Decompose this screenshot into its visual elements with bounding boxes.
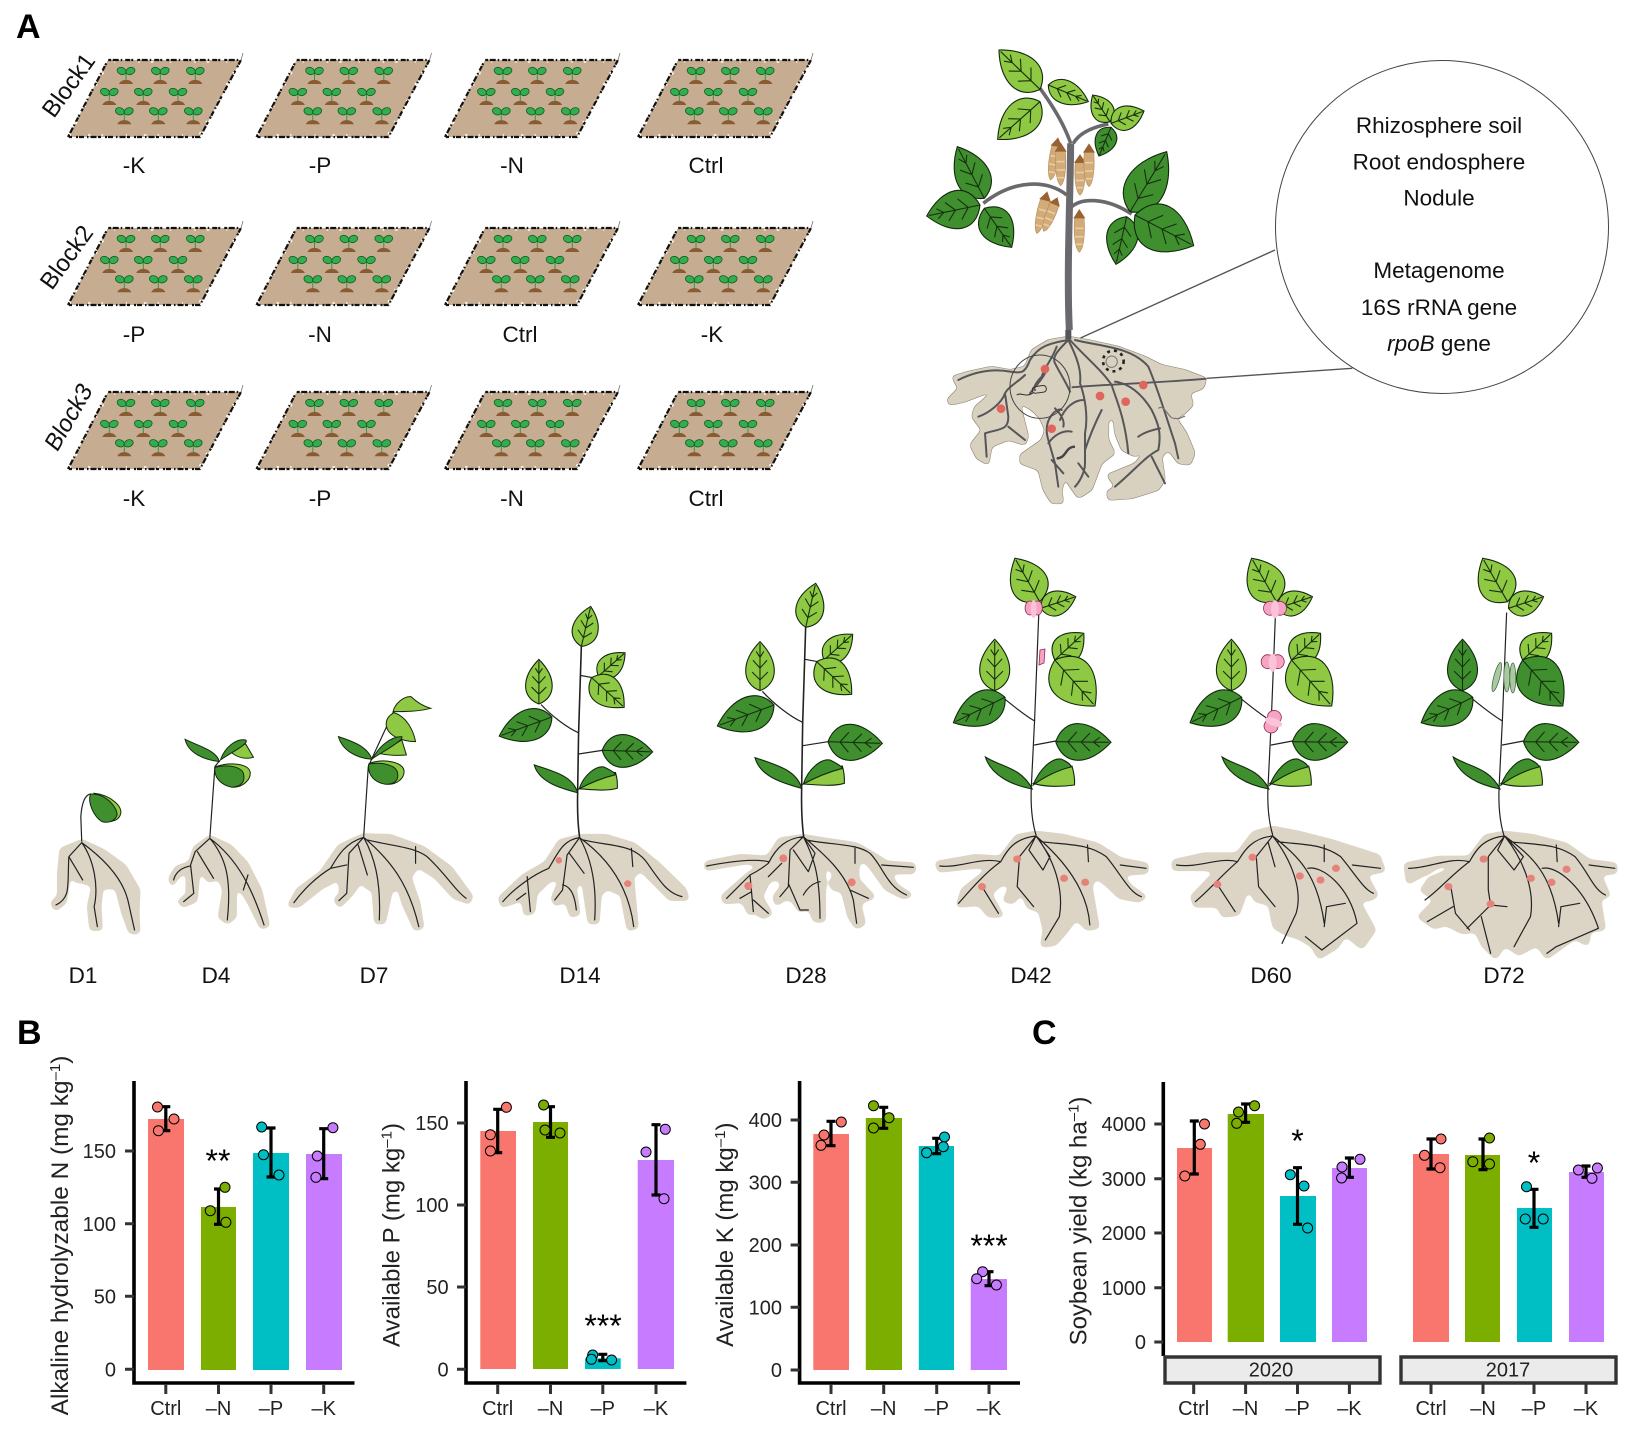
y axis title: –1	[378, 1131, 396, 1148]
y axis title: –1	[1065, 1105, 1082, 1121]
chart: soybean yield	[1065, 1082, 1616, 1420]
plot labels: block 1: -K	[123, 153, 145, 178]
row label: Block3: Block3	[40, 378, 98, 457]
label D28: D28	[785, 963, 827, 988]
y tick labels: 150	[415, 1113, 449, 1135]
plot labels: block 3: Ctrl	[688, 486, 724, 511]
icon: root squiggle	[1158, 407, 1185, 419]
x tick labels: –P	[1285, 1398, 1310, 1420]
callout circle: sample types and sequencing: Metagenome	[1373, 258, 1505, 283]
significance: ***	[970, 1228, 1008, 1264]
x tick labels: –P	[591, 1398, 615, 1420]
shoot D28	[711, 580, 883, 837]
y tick labels: 4000	[1102, 1114, 1146, 1136]
label D1: D1	[69, 963, 97, 988]
y tick labels: 0	[1135, 1332, 1146, 1354]
plot labels: block 2: Ctrl	[502, 322, 538, 347]
y axis title: Available K (mg kg	[712, 1147, 739, 1347]
x tick labels: Ctrl	[1178, 1398, 1209, 1420]
x tick labels: –N	[538, 1398, 563, 1420]
error bars	[161, 1107, 328, 1224]
y tick labels: 0	[437, 1360, 449, 1382]
ticks	[125, 1151, 324, 1394]
plot labels: block 3: -P	[309, 486, 331, 511]
shoot D14	[494, 604, 653, 837]
root zone	[947, 330, 1207, 503]
plot: block 2 Ctrl	[445, 221, 620, 305]
label D14: D14	[559, 963, 601, 988]
y tick labels: 0	[105, 1360, 116, 1382]
significance: 2020: *	[1291, 1123, 1304, 1159]
plot: block 3 -N	[445, 385, 620, 469]
pods	[1031, 136, 1095, 252]
plot: block 3 -P	[256, 385, 432, 469]
label D4: D4	[202, 963, 230, 988]
growth stage D4	[171, 739, 267, 988]
x tick labels: –N	[1470, 1398, 1496, 1420]
label D7: D7	[360, 963, 388, 988]
x tick labels: –K	[977, 1398, 1002, 1420]
roots D14	[501, 837, 687, 928]
row label: Block2: Block2	[35, 221, 99, 295]
callout circle: sample types and sequencing: Root endosphere	[1353, 150, 1525, 174]
plot: block 1 Ctrl	[638, 53, 813, 137]
callout circle: sample types and sequencing: 16S rRNA gene	[1361, 295, 1517, 320]
y axis title: Alkaline hydrolyzable N (mg kg	[47, 1080, 74, 1415]
growth stage D60	[1174, 549, 1383, 988]
y tick labels: 200	[749, 1235, 782, 1257]
y axis title: )	[47, 1056, 74, 1064]
growth stage D14	[494, 604, 687, 988]
y tick labels: 100	[415, 1195, 449, 1217]
axes	[134, 1081, 354, 1383]
y tick labels	[415, 1113, 449, 1382]
chart: alkaline hydrolyzable N	[47, 1056, 354, 1420]
y tick labels: 100	[83, 1214, 116, 1236]
icon: soil microbe	[1103, 351, 1124, 371]
y tick labels: 150	[83, 1141, 116, 1163]
icon: bacterium	[1017, 385, 1047, 395]
bars	[813, 1118, 1007, 1370]
axes	[800, 1081, 1020, 1383]
data points	[485, 1100, 670, 1365]
x tick labels: –N	[871, 1398, 896, 1420]
y tick labels: 0	[771, 1360, 782, 1382]
plot labels: block 2: -K	[701, 322, 723, 347]
roots and seedling D7	[290, 697, 471, 928]
label D60: D60	[1250, 963, 1292, 988]
significance: 2017: *	[1528, 1145, 1540, 1181]
x tick labels: –N	[1233, 1398, 1258, 1420]
data points	[152, 1102, 338, 1227]
chart: available P	[378, 1081, 686, 1420]
sampling magnifier outline	[1010, 355, 1070, 418]
x tick labels	[815, 1398, 1002, 1420]
growth stage D1	[53, 793, 138, 988]
x tick labels: –P	[259, 1398, 283, 1420]
y tick labels: 1000	[1102, 1278, 1146, 1300]
root soil blob	[947, 337, 1207, 503]
y axis title: –1	[47, 1064, 64, 1080]
roots D42	[938, 833, 1146, 945]
y tick labels	[1102, 1114, 1146, 1354]
plot labels: block 1: -P	[309, 153, 331, 178]
plot labels: block 2: -P	[123, 322, 145, 347]
callout lines to circle	[1080, 250, 1352, 378]
x tick labels: –P	[1522, 1398, 1546, 1420]
x tick labels: –K	[311, 1398, 337, 1420]
plot labels: block 3: -N	[500, 486, 524, 511]
callout circle: sample types and sequencing: Nodule	[1403, 186, 1475, 210]
roots D72	[1406, 833, 1615, 957]
y tick labels: 3000	[1102, 1169, 1146, 1191]
icon: worm	[1057, 447, 1075, 458]
growth stage D72	[1406, 549, 1615, 988]
plot: block 2 -N	[256, 221, 432, 305]
y axis title: Soybean yield (kg ha	[1065, 1121, 1092, 1345]
roots D60	[1174, 828, 1383, 957]
x tick labels	[150, 1398, 337, 1420]
y axis title: )	[1065, 1097, 1092, 1105]
callout circle: sample types and sequencing: rpoB gene	[1387, 331, 1491, 356]
leaves	[923, 38, 1204, 268]
roots and seedling D4	[171, 739, 267, 927]
y axis title: )	[712, 1123, 739, 1131]
error bars	[1190, 1104, 1590, 1227]
plot labels: block 1: -N	[500, 153, 524, 178]
ticks	[791, 1120, 989, 1394]
plot: block 1 -N	[445, 53, 620, 137]
x tick labels: Ctrl	[150, 1398, 181, 1420]
plot labels: block 1	[123, 153, 724, 178]
error bars	[493, 1107, 660, 1361]
plot labels: block 2: -N	[308, 322, 332, 347]
stem and branches	[1068, 143, 1071, 330]
y tick labels	[83, 1141, 116, 1382]
growth stage D42	[938, 549, 1146, 988]
y tick labels: 400	[749, 1110, 782, 1132]
facet strip: 2017: 2017	[1486, 1360, 1530, 1382]
error bars	[826, 1107, 994, 1286]
bars	[480, 1122, 674, 1369]
ticks	[1154, 1124, 1586, 1394]
shoot	[923, 38, 1204, 330]
label D72: D72	[1483, 963, 1525, 988]
ticks	[457, 1123, 656, 1394]
x tick labels: –P	[924, 1398, 949, 1420]
facet strip: 2017	[1401, 1357, 1616, 1383]
significance: ***	[584, 1308, 622, 1344]
y axis	[1162, 1082, 1165, 1356]
data points	[816, 1101, 1001, 1290]
plot: block 3 Ctrl	[638, 385, 813, 469]
x tick labels: –N	[206, 1398, 231, 1420]
roots D28	[707, 837, 913, 927]
plot labels: block 1: Ctrl	[688, 153, 724, 178]
panel C label: C	[1032, 1014, 1057, 1052]
callout circle: sample types and sequencing: Rhizosphere soil	[1356, 113, 1522, 138]
y tick labels: 50	[426, 1277, 449, 1299]
plot: block 2 -P	[68, 221, 243, 305]
illustration: mature soybean plant	[923, 38, 1207, 503]
bars	[148, 1119, 342, 1370]
y tick labels	[749, 1110, 782, 1382]
facet strip: 2020: 2020	[1249, 1360, 1293, 1382]
root system	[958, 340, 1178, 487]
x tick labels: –K	[644, 1398, 669, 1420]
label D42: D42	[1010, 963, 1052, 988]
panel A label: A	[16, 8, 41, 46]
shoot D60	[1183, 549, 1349, 835]
y tick labels: 50	[94, 1286, 116, 1308]
callout circle: sample types and sequencing	[1276, 60, 1608, 394]
panel B label: B	[17, 1014, 42, 1052]
x tick labels: Ctrl	[482, 1398, 513, 1420]
plot: block 3 -K	[68, 385, 243, 469]
x tick labels: –K	[1574, 1398, 1599, 1420]
y tick labels: 100	[749, 1298, 782, 1320]
facet strip: 2020	[1165, 1357, 1380, 1383]
y axis title: Available P (mg kg	[378, 1148, 406, 1347]
x tick labels: Ctrl	[1415, 1398, 1447, 1420]
plot: block 1 -K	[68, 53, 243, 137]
plot labels: block 3	[123, 486, 724, 511]
roots D1	[53, 793, 138, 932]
panel A: field plot layout	[35, 49, 813, 511]
growth stage D7	[290, 697, 471, 988]
data points	[1180, 1101, 1602, 1233]
y axis title: )	[378, 1123, 406, 1131]
growth stage D28	[707, 580, 913, 988]
plot: block 1 -P	[256, 53, 432, 137]
y tick labels: 2000	[1102, 1223, 1146, 1245]
row label: Block1: Block1	[37, 49, 101, 123]
x tick labels: –K	[1337, 1398, 1362, 1420]
x tick labels	[1178, 1398, 1599, 1420]
plot labels: block 3: -K	[123, 486, 145, 511]
plot labels: block 2	[123, 322, 723, 347]
bars	[1177, 1114, 1604, 1342]
x tick labels	[482, 1398, 669, 1420]
significance: **	[206, 1143, 230, 1179]
chart: available K	[712, 1081, 1020, 1420]
y axis title: –1	[712, 1131, 729, 1147]
nodules	[997, 365, 1148, 433]
plot: block 2 -K	[638, 221, 813, 305]
axes	[466, 1081, 686, 1383]
x tick labels: Ctrl	[815, 1398, 847, 1420]
shoot D42	[946, 549, 1112, 835]
shoot D72	[1414, 549, 1580, 835]
y tick labels: 300	[749, 1172, 782, 1194]
